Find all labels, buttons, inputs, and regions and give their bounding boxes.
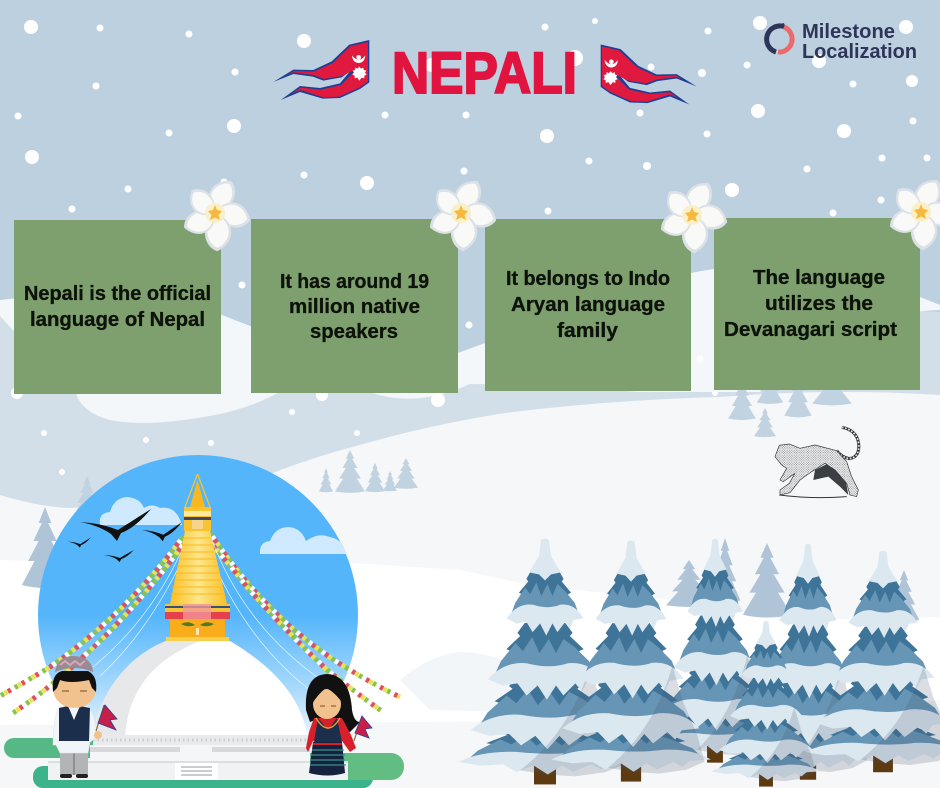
- panel: official language: Nepali is the official: [24, 283, 211, 305]
- panel: language family: family: [557, 320, 619, 342]
- panel: official language: [14, 220, 221, 394]
- icon: flower on card one: [180, 175, 252, 253]
- panel: language family: Aryan language: [511, 294, 665, 316]
- panel: language family: [485, 219, 691, 391]
- stupa illustration: [0, 455, 404, 788]
- icon: snow leopard: [775, 427, 859, 498]
- man in traditional dress: [53, 656, 117, 778]
- title: NEPALI: [392, 41, 577, 106]
- clouds: [100, 497, 346, 554]
- panel: script: [714, 218, 920, 390]
- blue sky circle: [38, 455, 358, 775]
- tree: front left: [458, 538, 632, 784]
- tree: front second: [551, 541, 711, 782]
- logo: Milestone Localization: [767, 21, 917, 63]
- panel: language family: It belongs to Indo: [506, 268, 670, 290]
- logo: Milestone Localization: Milestone: [802, 21, 895, 43]
- tree: back left: [653, 539, 777, 763]
- green ground strips: [4, 738, 404, 788]
- distant pine trees: [74, 360, 852, 516]
- logo: Milestone Localization: Localization: [802, 41, 917, 63]
- woman in traditional dress: [306, 674, 372, 776]
- icon: left Nepal flag: [273, 40, 369, 100]
- icon: right Nepal flag: [601, 44, 697, 104]
- large pines behind the stupa and forest: [22, 507, 919, 622]
- tree: small centre: [711, 621, 821, 787]
- panel: native speakers: It has around 19: [280, 271, 429, 293]
- tree: front far right: [805, 551, 940, 772]
- panel: native speakers: million native: [289, 296, 420, 318]
- panel: script: Devanagari script: [724, 319, 897, 341]
- temple base: [48, 735, 348, 780]
- tree: back right: [744, 544, 872, 780]
- snowfall dots: [11, 16, 930, 475]
- panel: script: The language: [753, 267, 885, 289]
- golden tower: [165, 474, 230, 641]
- birds: [68, 509, 182, 562]
- background snow hills: [0, 265, 940, 788]
- dome: [93, 641, 307, 735]
- panel: script: utilizes the: [765, 293, 873, 315]
- icon: flower on card four: [886, 174, 940, 252]
- icon: flower on card three: [657, 177, 729, 255]
- panel: native speakers: [251, 219, 458, 393]
- panel: official language: language of Nepal: [30, 309, 205, 331]
- snow covered pine forest: [458, 538, 940, 787]
- ropes: [93, 543, 317, 690]
- icon: flower on card two: [426, 175, 498, 253]
- panel: native speakers: speakers: [310, 321, 398, 343]
- prayer flag strings: [0, 533, 400, 713]
